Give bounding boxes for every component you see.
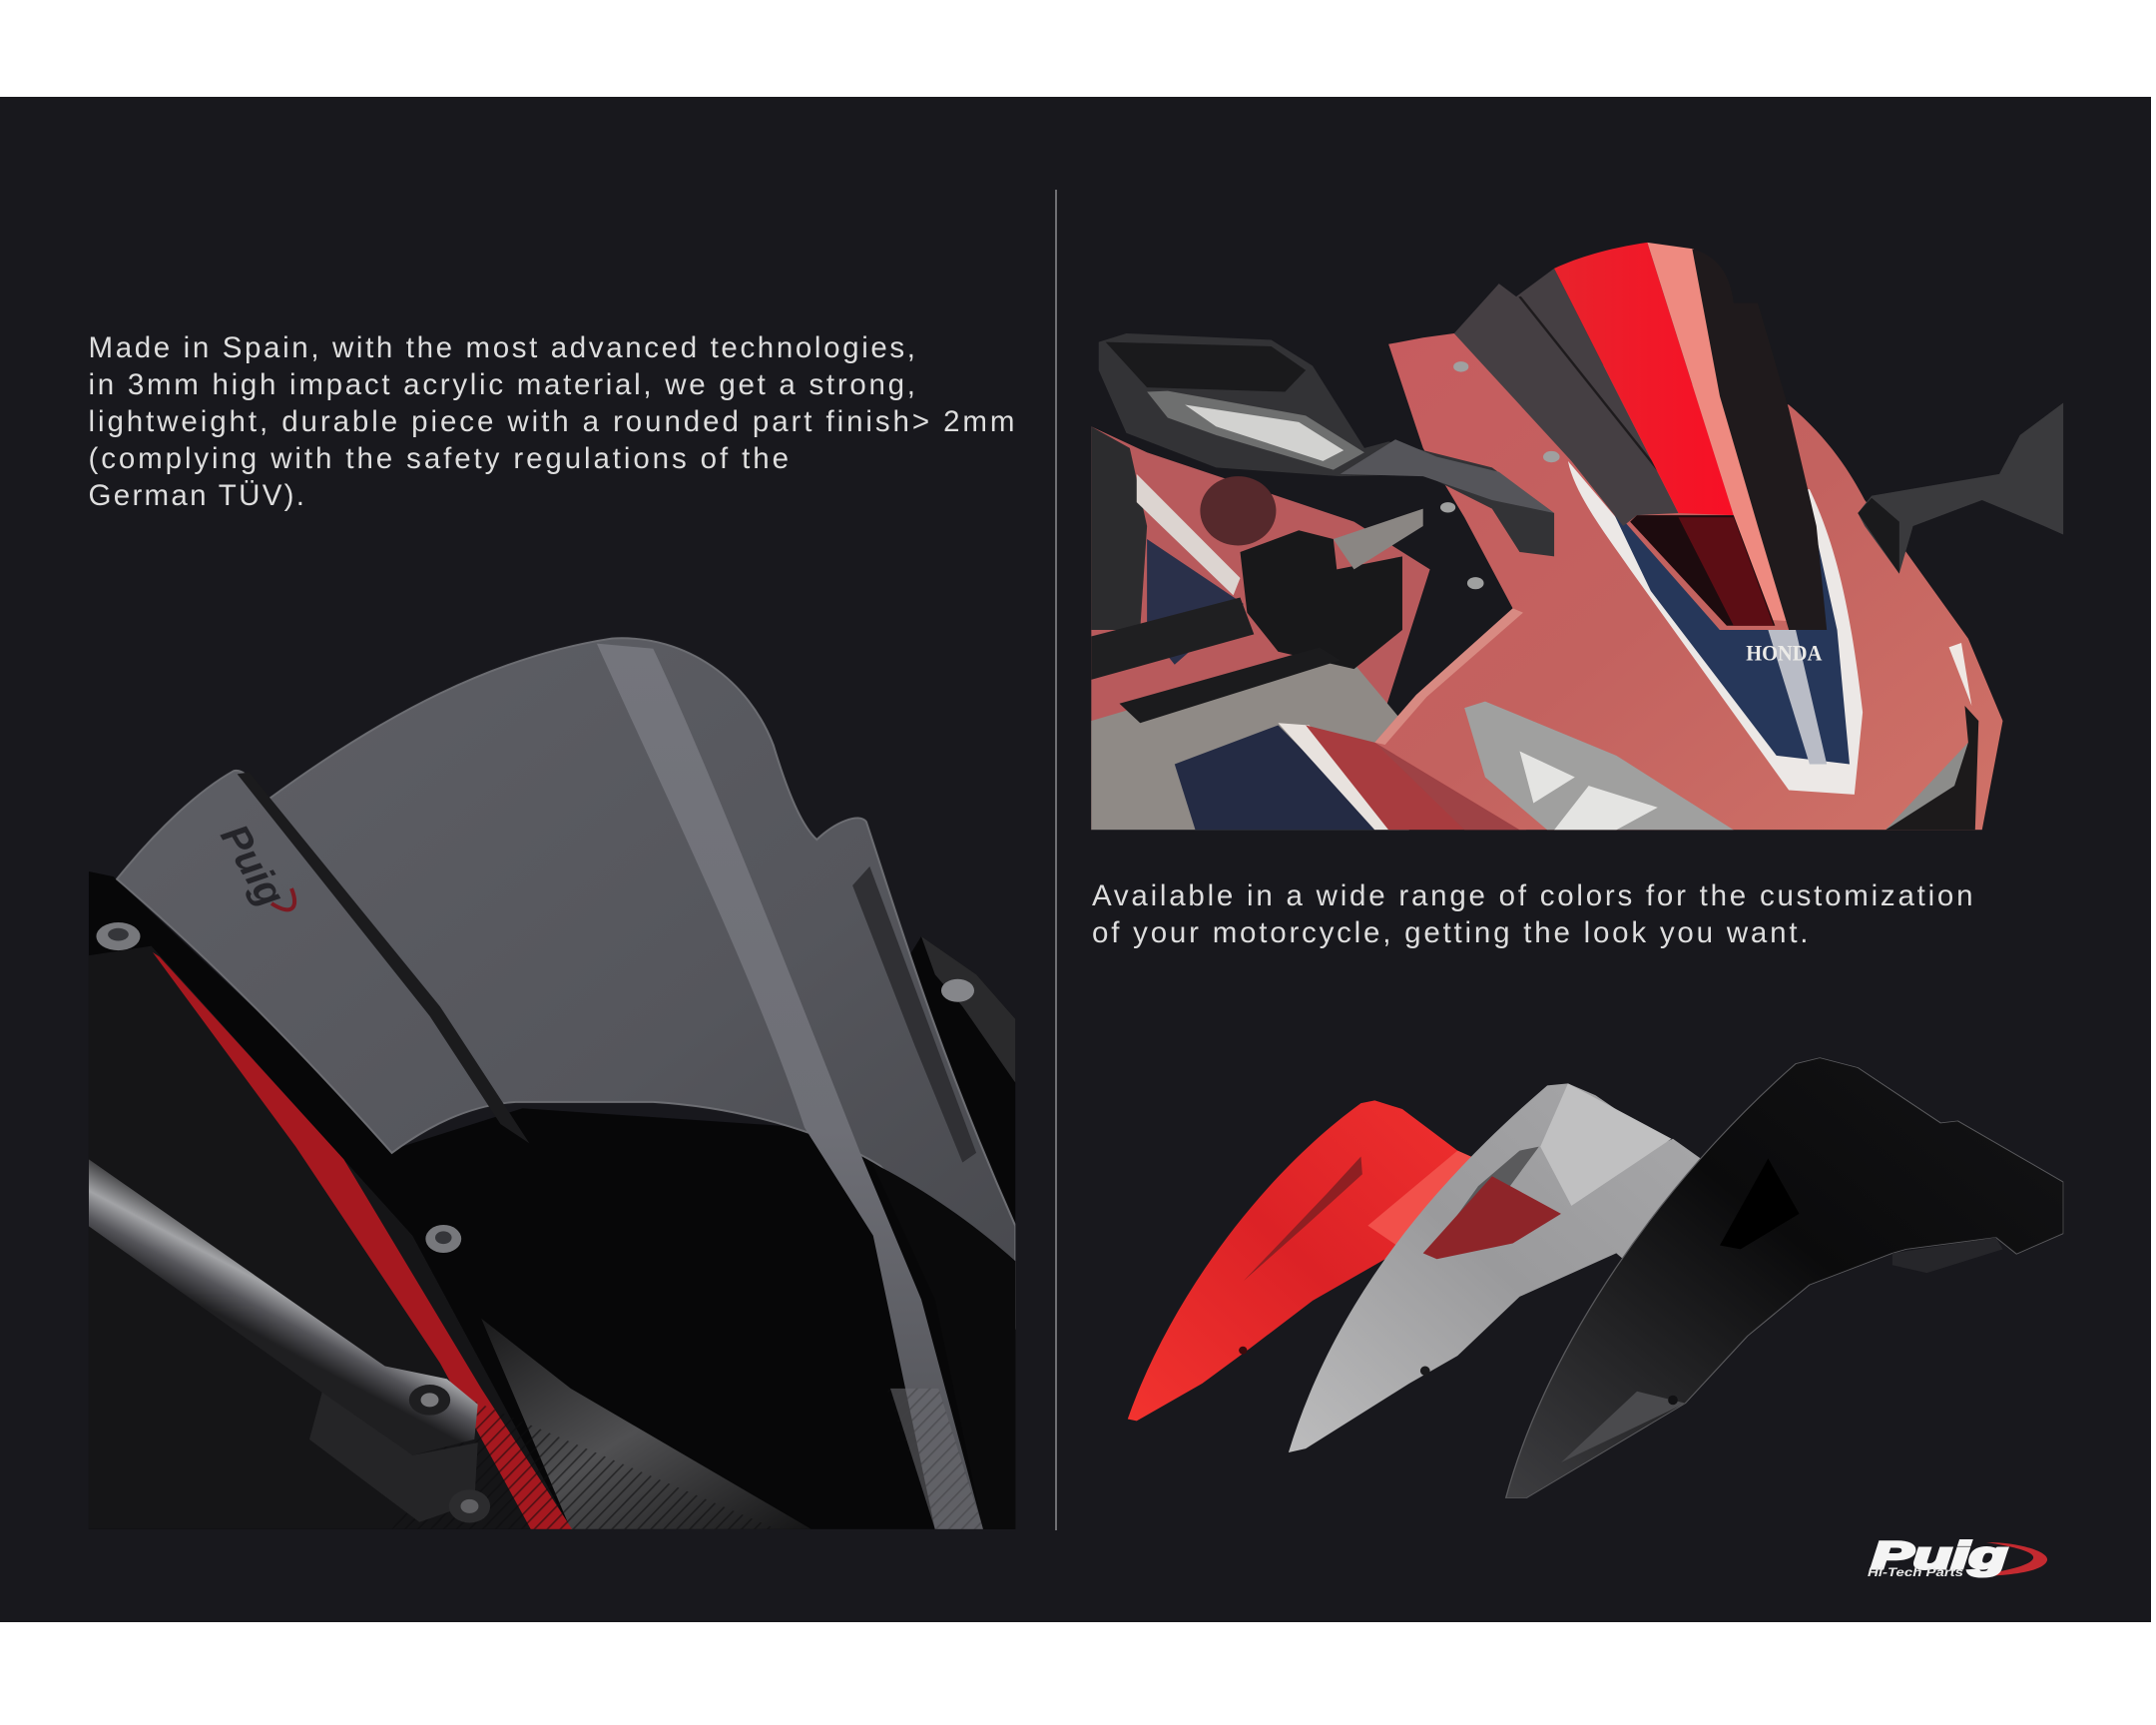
photo: motorcycle with red windscreen bbox=[1091, 243, 2063, 830]
fairing fold bbox=[1374, 608, 1523, 745]
screen lower red bbox=[1679, 517, 1774, 626]
controls bbox=[1240, 530, 1402, 669]
text: colors description: of your motorcycle, getting the look you want. bbox=[1092, 916, 1809, 949]
seat bbox=[1091, 426, 1147, 630]
headlight bbox=[1464, 702, 1734, 830]
fairing bbox=[1374, 333, 2002, 830]
lower white stripe bbox=[1279, 723, 1409, 830]
text: made in Spain description: in 3mm high impact acrylic material, we get a strong, bbox=[88, 368, 915, 401]
screen pink band bbox=[1647, 243, 1793, 621]
windscreen logo: Puig bbox=[212, 817, 293, 914]
color windscreens bbox=[1128, 1058, 2063, 1498]
puig hi-tech parts logo bbox=[1868, 1535, 2047, 1579]
honda lettering: HONDA bbox=[1746, 641, 1823, 666]
black windscreen bbox=[1506, 1058, 2063, 1498]
mirror arm bbox=[1341, 439, 1554, 513]
mirror arm bbox=[89, 1159, 478, 1455]
screen lower dark bbox=[1630, 515, 1775, 626]
right fairing stripe bbox=[1949, 643, 1971, 706]
red stripe bbox=[153, 952, 572, 1529]
text: made in Spain description: lightweight, durable piece with a rounded part finish> 2mm bbox=[88, 405, 1015, 438]
photo: smoke windscreen close-up bbox=[89, 638, 1015, 1529]
screen highlight strip bbox=[597, 644, 983, 1529]
mirror top shading bbox=[1106, 342, 1306, 392]
navy nose bbox=[1609, 504, 1850, 764]
grey hatched strip bbox=[890, 1389, 983, 1529]
hatch overlay bbox=[475, 1388, 981, 1529]
text: made in Spain description: (complying with the safety regulations of the bbox=[88, 442, 789, 475]
honda badge bbox=[1200, 476, 1276, 545]
navy nose centre stripe bbox=[1768, 630, 1827, 764]
grip bbox=[1091, 598, 1254, 680]
logo swoosh bbox=[1971, 1542, 2047, 1576]
tank white stripe bbox=[1137, 474, 1240, 595]
side lip of screen bbox=[852, 866, 976, 1162]
puig hi-tech parts logo: Hi-Tech Parts bbox=[1868, 1565, 1963, 1579]
screen fold bbox=[238, 772, 529, 1143]
lamp glare bbox=[1185, 405, 1344, 461]
mirror lamp bbox=[1147, 391, 1364, 470]
bolts bbox=[1453, 361, 1468, 372]
screen dark lower section bbox=[871, 1162, 1015, 1529]
puig hi-tech parts logo: Puig bbox=[1872, 1535, 2007, 1577]
right mirror shade bbox=[1858, 498, 1899, 574]
lower navy panel bbox=[1175, 725, 1381, 830]
right intake black bbox=[1886, 706, 1978, 830]
text: made in Spain description bbox=[88, 331, 1015, 512]
white outline around navy bbox=[1568, 461, 1863, 795]
vertical divider bbox=[1055, 190, 1057, 1530]
screen black band bbox=[1692, 249, 1827, 630]
screen smoke bbox=[1454, 269, 1679, 526]
right headlight bbox=[1886, 743, 1968, 830]
text: made in Spain description: German TÜV). bbox=[88, 479, 304, 512]
bolts bbox=[96, 922, 141, 950]
lever bbox=[1120, 655, 1330, 723]
tank navy panel bbox=[1147, 539, 1244, 665]
screen bbox=[117, 638, 1015, 1328]
text: made in Spain description: Made in Spain, with the most advanced technologies, bbox=[88, 331, 915, 364]
bike body bbox=[89, 871, 1015, 1529]
lower red cowl bbox=[1306, 725, 1526, 830]
red windscreen bbox=[1128, 1100, 1477, 1421]
lower frame bbox=[1091, 663, 1397, 831]
tank bbox=[1091, 426, 1430, 830]
text: colors description bbox=[1092, 879, 1972, 949]
left mirror housing bbox=[1099, 333, 1554, 556]
screen red band bbox=[1554, 243, 1734, 515]
right mirror bbox=[1858, 402, 2063, 574]
right fairing cowl bbox=[921, 936, 1015, 1083]
headlight detail bbox=[1519, 751, 1658, 830]
screen fold line bbox=[1519, 295, 1657, 471]
text: colors description: Available in a wide range of colors for the customization bbox=[1092, 879, 1972, 912]
dark fairing left side bbox=[89, 946, 571, 1529]
smoke light windscreen bbox=[1289, 1083, 1706, 1452]
brake cables bbox=[1334, 509, 1423, 569]
lower-left fairing shadow bbox=[1374, 743, 1519, 830]
mirror mount bbox=[309, 1389, 478, 1522]
carbon fairing bbox=[481, 1319, 811, 1529]
